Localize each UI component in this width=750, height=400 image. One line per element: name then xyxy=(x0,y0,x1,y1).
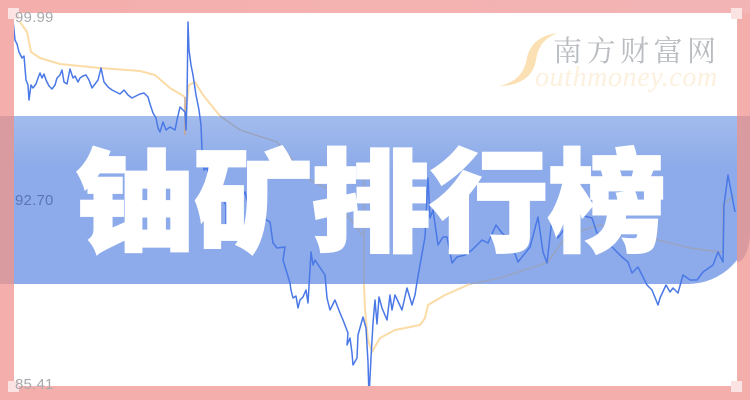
axis label: max: 99.99 xyxy=(15,9,54,26)
title: 铀矿排行榜 xyxy=(76,113,666,274)
moving average line: inside banner xyxy=(220,116,362,235)
frame: pink bottom border xyxy=(0,386,750,400)
moving average line: below banner xyxy=(364,284,470,352)
moving average line: second segment xyxy=(185,82,220,116)
watermark: southmoney logo xyxy=(500,29,721,93)
corner marker: top left xyxy=(8,8,19,19)
corner marker: top right xyxy=(731,8,742,19)
band overlay on left border xyxy=(0,116,14,284)
axis label: mid: 92.70 xyxy=(15,192,54,209)
watermark: southmoney logo: 南方财富网 xyxy=(553,29,721,70)
frame: pink right border xyxy=(737,13,750,387)
band overlay on right border xyxy=(737,116,750,262)
corner marker: bottom right xyxy=(731,381,742,392)
corner marker: bottom left xyxy=(8,381,19,392)
watermark: southmoney logo: outhmoney.com xyxy=(535,62,718,93)
frame: pink left border xyxy=(0,13,14,387)
spike line xyxy=(184,97,186,135)
frame: pink top border xyxy=(0,0,750,13)
moving average line: vertical drop xyxy=(363,170,365,284)
moving average line: above banner xyxy=(20,22,185,97)
moving average line: right section xyxy=(470,195,735,284)
axis label: min: 85.41 xyxy=(15,376,54,393)
band: blue title banner xyxy=(0,116,750,284)
